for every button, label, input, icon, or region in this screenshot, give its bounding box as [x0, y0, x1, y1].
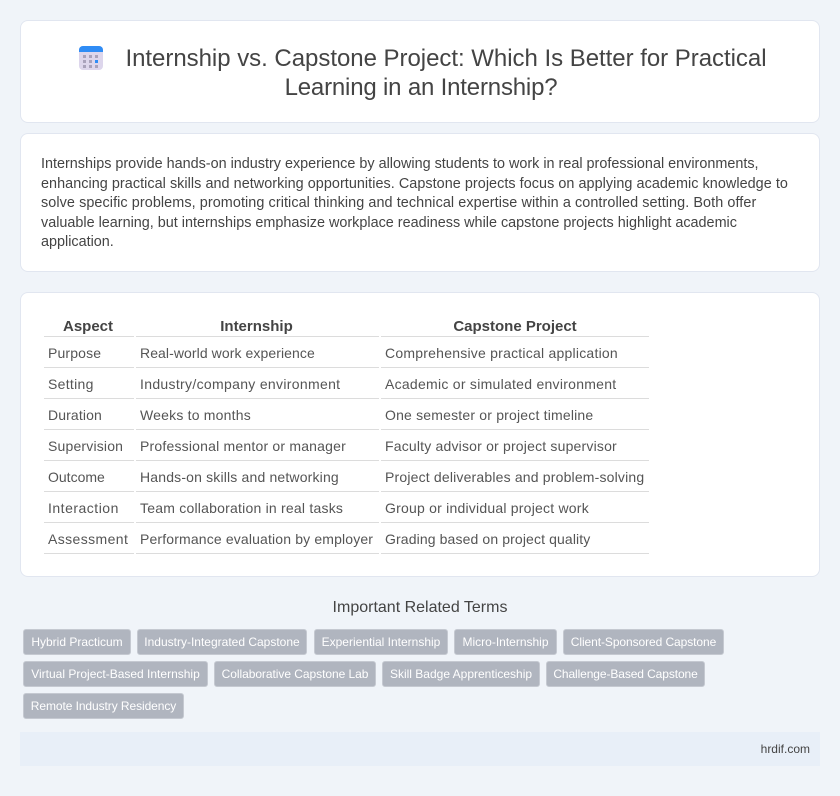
table header row: Aspect	[63, 318, 113, 335]
row: Setting: Setting	[48, 376, 94, 392]
row: Interaction: Group or individual project work	[385, 500, 589, 516]
row: Purpose: Comprehensive practical application	[385, 345, 618, 361]
row: Interaction	[48, 500, 589, 516]
header panel	[20, 20, 820, 123]
description text: Internships provide hands-on industry experience by allowing students to work in real professional environments,	[41, 156, 759, 172]
row: Assessment	[48, 531, 590, 547]
footer source: hrdif.com	[761, 742, 810, 756]
row: Supervision: Supervision	[48, 438, 123, 454]
description text: enhancing practical skills and networking opportunities. Capstone projects focus on applying academic knowledge to	[41, 176, 788, 192]
row: Outcome: Outcome	[48, 469, 105, 485]
related terms tags: Client-Sponsored Capstone	[571, 635, 716, 649]
row: Duration: Duration	[48, 407, 102, 423]
related terms tags: Virtual Project-Based Internship	[31, 667, 200, 681]
row: Assessment: Performance evaluation by employer	[140, 531, 373, 547]
description text	[41, 156, 788, 250]
related terms tags: Industry-Integrated Capstone	[144, 635, 300, 649]
row: Setting: Academic or simulated environment	[385, 376, 616, 392]
row: Duration	[48, 407, 593, 423]
row: Purpose	[48, 345, 618, 361]
row: Duration: Weeks to months	[140, 407, 251, 423]
row: Supervision: Professional mentor or manager	[140, 438, 346, 454]
title	[125, 45, 767, 101]
panel: description	[20, 133, 820, 272]
row: Duration: One semester or project timeline	[385, 407, 593, 423]
table header row: Internship	[220, 318, 293, 335]
row: Assessment: Grading based on project quality	[385, 531, 590, 547]
related terms tags: Remote Industry Residency	[31, 699, 176, 713]
title: Learning in an Internship?	[285, 74, 557, 101]
icon: calendar	[79, 46, 103, 70]
footer bar	[20, 732, 820, 766]
row: Purpose: Real-world work experience	[140, 345, 315, 361]
table header row: Capstone Project	[453, 318, 577, 335]
row: Outcome	[48, 469, 644, 485]
related terms tags: Collaborative Capstone Lab	[222, 667, 368, 681]
related terms tags: Experiential Internship	[322, 635, 440, 649]
row: Supervision: Faculty advisor or project supervisor	[385, 438, 617, 454]
title: Internship vs. Capstone Project: Which Is Better for Practical	[125, 45, 767, 72]
row: Setting	[48, 376, 616, 392]
row: Interaction: Interaction	[48, 500, 119, 516]
description text: solve specific problems, promoting critical thinking and technical expertise within a controlled setting. Both offer	[41, 195, 756, 211]
panel: comparison table	[20, 292, 820, 577]
description text: application.	[41, 234, 114, 250]
row: Interaction: Team collaboration in real tasks	[140, 500, 343, 516]
related terms tags: Micro-Internship	[462, 635, 549, 649]
heading: related terms: Important Related Terms	[333, 599, 507, 616]
row: Purpose: Purpose	[48, 345, 101, 361]
row: Supervision	[48, 438, 617, 454]
row: Outcome: Project deliverables and problem-solving	[385, 469, 644, 485]
row: Setting: Industry/company environment	[140, 376, 340, 392]
row: Assessment: Assessment	[48, 531, 128, 547]
related terms tags: Skill Badge Apprenticeship	[390, 667, 532, 681]
related terms tags: Challenge-Based Capstone	[553, 667, 698, 681]
table header row	[63, 318, 577, 335]
related terms tags: Hybrid Practicum	[31, 635, 123, 649]
related terms tags	[23, 629, 724, 719]
row: Outcome: Hands-on skills and networking	[140, 469, 339, 485]
description text: valuable learning, but internships emphasize workplace readiness while capstone projects highlight academic	[41, 214, 737, 230]
